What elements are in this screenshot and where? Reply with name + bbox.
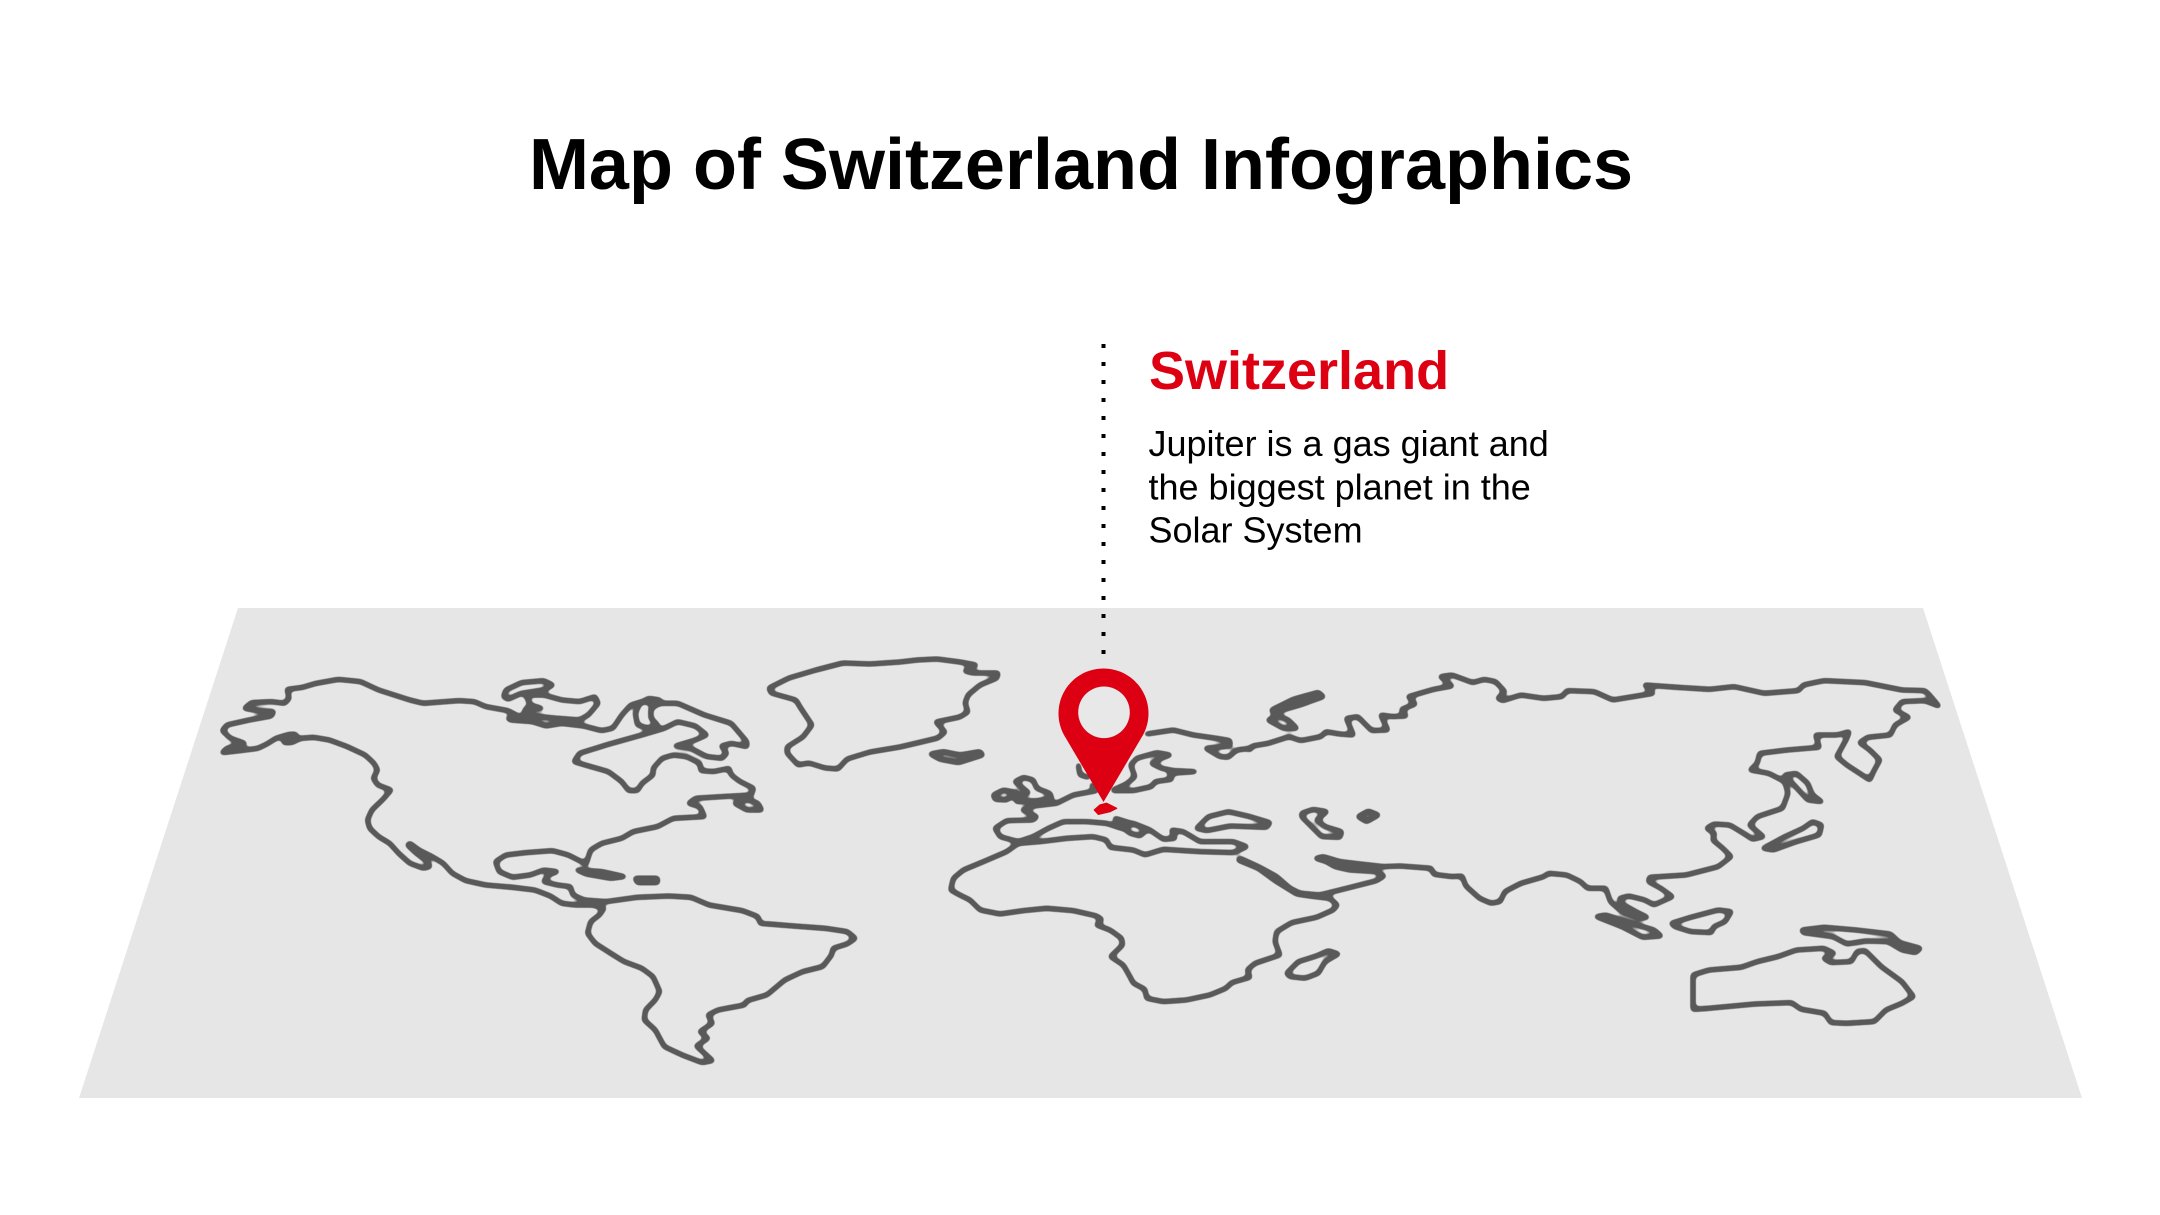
callout body text bbox=[1148, 423, 1549, 551]
callout body text: Solar System bbox=[1148, 510, 1363, 551]
highlighted country: Switzerland shape bbox=[1094, 803, 1117, 814]
Europe and Africa bbox=[931, 692, 1400, 1002]
icon: location pin bbox=[1059, 668, 1149, 802]
Asia and Australia bbox=[1250, 675, 1939, 1023]
Greenland bbox=[769, 659, 998, 769]
callout body text: Jupiter is a gas giant and bbox=[1148, 423, 1549, 464]
Americas bbox=[222, 679, 855, 1063]
callout: Switzerland bbox=[1148, 341, 1549, 551]
callout body text: the biggest planet in the bbox=[1148, 466, 1531, 507]
title: Map of Switzerland Infographics bbox=[529, 125, 1633, 205]
callout heading: Switzerland bbox=[1149, 341, 1449, 401]
dotted leader line bbox=[1102, 344, 1106, 656]
map panel: tilted grey plane bbox=[79, 608, 2082, 1098]
world map outlines bbox=[222, 659, 1939, 1063]
